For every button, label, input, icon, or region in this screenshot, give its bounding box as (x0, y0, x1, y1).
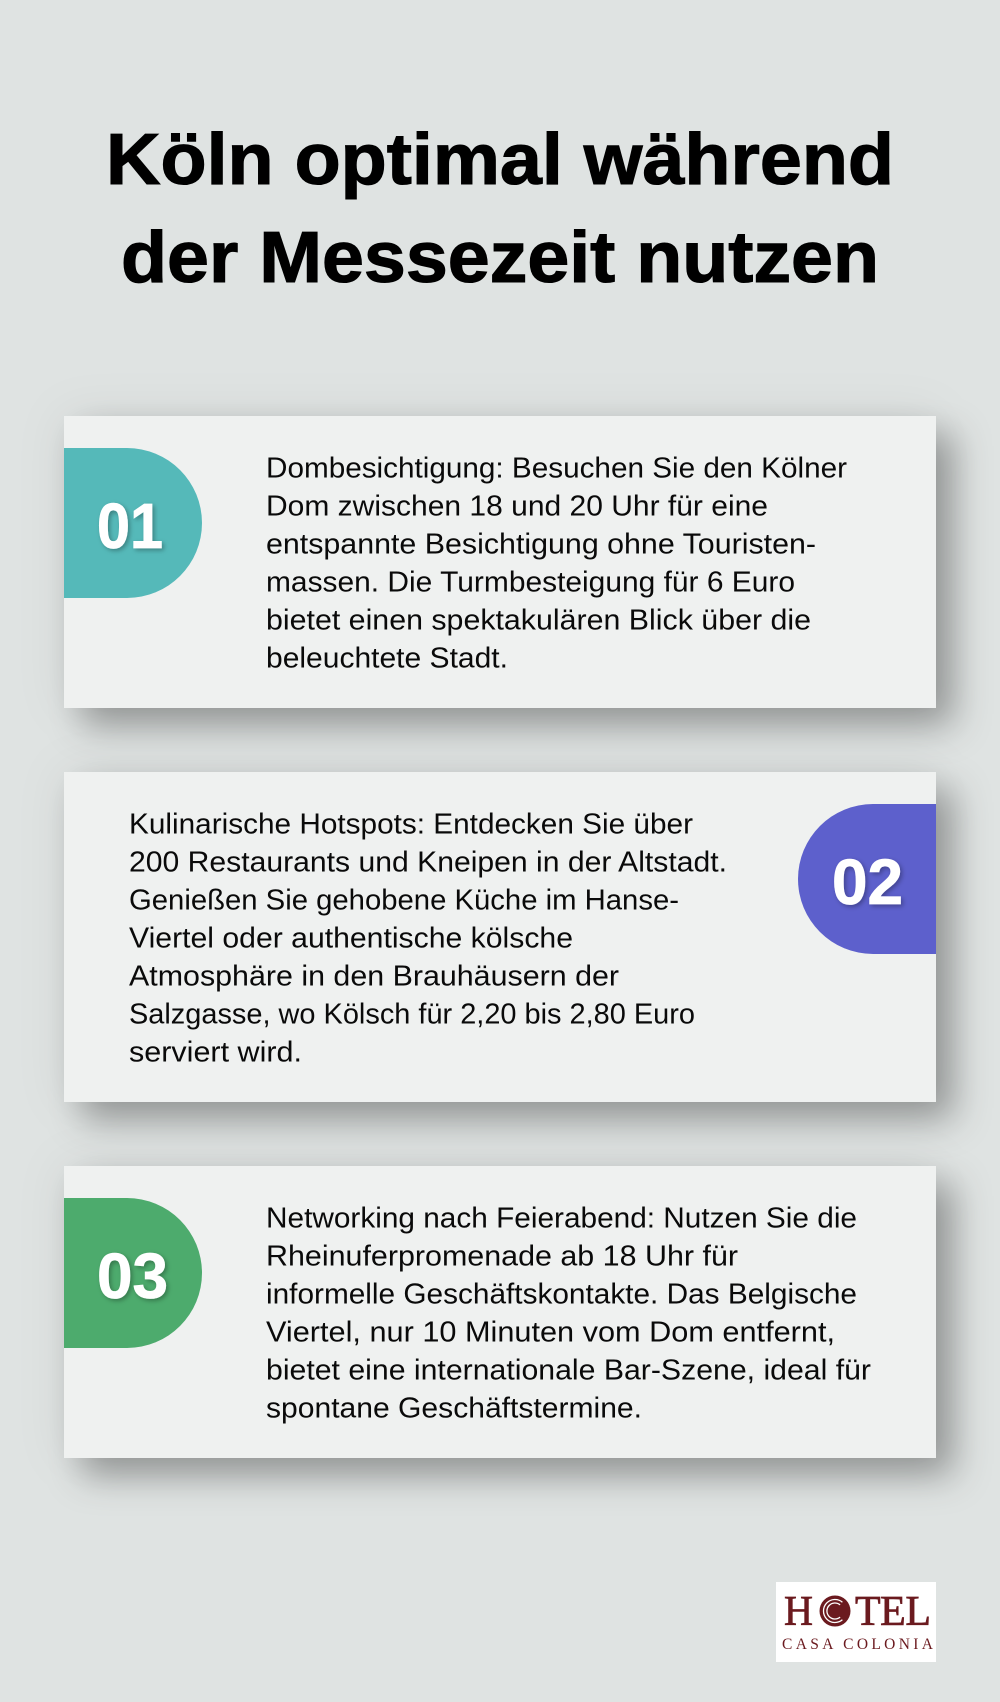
text block 03 (266, 1202, 872, 1424)
text block 02: Salzgasse, wo Kölsch für 2,20 bis 2,80 Euro (129, 998, 695, 1030)
logo: Hotel Casa Colonia: CASA COLONIA (782, 1636, 934, 1653)
logo: Hotel Casa Colonia: O (823, 1593, 847, 1633)
title: der Messezeit nutzen (121, 218, 879, 298)
text block 03: informelle Geschäftskontakte. Das Belgische (266, 1278, 857, 1310)
text block 01: Dombesichtigung: Besuchen Sie den Kölner (266, 452, 848, 484)
card background 03 (64, 1166, 936, 1458)
text block 03: Rheinuferpromenade ab 18 Uhr für (266, 1240, 739, 1272)
text block 03: Networking nach Feierabend: Nutzen Sie die (266, 1202, 857, 1234)
text block 02: Genießen Sie gehobene Küche im Hanse- (129, 884, 679, 916)
text block 01: entspannte Besichtigung ohne Touristen- (266, 528, 816, 560)
panel: step 01 Dombesichtigung (64, 416, 936, 708)
text block 03: spontane Geschäftstermine. (266, 1392, 642, 1424)
text block 02: Kulinarische Hotspots: Entdecken Sie über (129, 808, 694, 840)
text block 01: beleuchtete Stadt. (266, 642, 508, 674)
text block 02: Atmosphäre in den Brauhäusern der (129, 960, 620, 992)
title (106, 120, 894, 298)
badge 01: 01 (97, 490, 163, 562)
text block 01: Dom zwischen 18 und 20 Uhr für eine (266, 490, 768, 522)
text block 01: bietet einen spektakulären Blick über die (266, 604, 811, 636)
badge 03 (64, 1198, 202, 1348)
panel: step 02 Kulinarische Hotspots (64, 772, 936, 1102)
text block 01: massen. Die Turmbesteigung für 6 Euro (266, 566, 795, 598)
text block 01 (266, 452, 848, 674)
logo: Hotel Casa Colonia: H (784, 1589, 813, 1635)
badge 02 (798, 804, 936, 954)
text block 02: 200 Restaurants und Kneipen in der Altstadt. (129, 846, 727, 878)
text block 03: Viertel, nur 10 Minuten vom Dom entfernt, (266, 1316, 835, 1348)
badge 01 (64, 448, 202, 598)
panel: step 03 Networking nach Feierabend (64, 1166, 936, 1458)
card background 01 (64, 416, 936, 708)
badge 03: 03 (97, 1240, 168, 1312)
text block 02: Viertel oder authentische kölsche (129, 922, 573, 954)
text block 02: serviert wird. (129, 1036, 302, 1068)
logo: Hotel Casa Colonia: TEL (855, 1589, 931, 1635)
logo: Hotel Casa Colonia (776, 1582, 936, 1662)
card background 02 (64, 772, 936, 1102)
badge 02: 02 (832, 846, 903, 918)
title: Köln optimal während (106, 120, 894, 200)
icon: spiral O (820, 1596, 850, 1626)
text block 02 (129, 808, 727, 1068)
text block 03: bietet eine internationale Bar-Szene, ideal für (266, 1354, 872, 1386)
